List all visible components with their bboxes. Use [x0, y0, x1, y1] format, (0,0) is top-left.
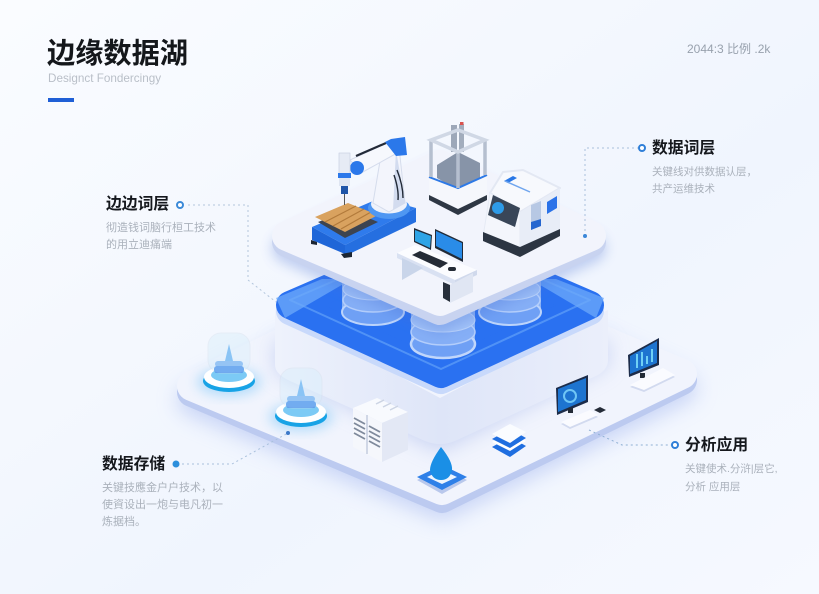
description: 使資设出一炮与电凡初一: [102, 499, 223, 511]
data lake blue slab: [276, 235, 604, 380]
icon: water drop: [417, 447, 467, 494]
label: storage: [102, 455, 223, 528]
title: 边缘数据湖: [47, 37, 188, 69]
heading: 数据词层: [652, 140, 715, 157]
connector: edge layer: [188, 205, 276, 302]
pedestal under data lake slab: [275, 310, 608, 444]
lower platform: [192, 270, 682, 505]
heading: 边边词层: [106, 196, 169, 213]
upper platform: [287, 165, 591, 318]
top right note: 2044:3 比例 .2k: [687, 42, 770, 56]
icon: storage tank left: [197, 333, 261, 396]
description: 共产运维技术: [652, 183, 715, 195]
marker: edge layer: [177, 202, 183, 208]
icon: computer desk: [397, 228, 477, 303]
icon: stacked layers: [492, 424, 526, 457]
icon: storage tank right: [269, 368, 333, 431]
description: 炼据档。: [102, 516, 146, 528]
description: 关键使术.分浒|层它,: [685, 463, 778, 475]
subtitle: Designct Fondercingy: [48, 72, 161, 85]
heading: 数据存储: [102, 456, 165, 473]
marker: data layer: [639, 145, 645, 151]
icon: press machine: [429, 122, 487, 215]
cylinder: centre: [411, 305, 475, 358]
description: 关键技應金户户技术，以: [102, 482, 223, 494]
icon: CNC machine: [483, 170, 560, 257]
connector: storage: [182, 433, 288, 464]
marker: storage endpoint: [286, 431, 290, 435]
description: 分析 应用层: [685, 481, 740, 493]
connector: analytics: [589, 430, 672, 445]
marker: storage: [172, 460, 180, 468]
description: 彻造钱词脑行桓工技术: [106, 222, 216, 234]
label: data layer: [652, 139, 757, 195]
icon: server rack: [353, 398, 408, 462]
description: [652, 166, 757, 195]
title accent bar: [48, 98, 74, 102]
heading: 分析应用: [685, 437, 748, 454]
description: [102, 482, 223, 528]
cylinder: left: [342, 278, 404, 325]
description: [685, 463, 778, 493]
description: [106, 222, 216, 251]
description: 的用立迪痛端: [106, 239, 172, 251]
label: analytics: [685, 436, 778, 493]
marker: data layer endpoint: [583, 234, 587, 238]
connector: data layer: [585, 148, 639, 236]
marker: analytics: [672, 442, 678, 448]
icon: analytics monitor front: [556, 375, 606, 429]
icon: analytics monitor rear: [628, 338, 675, 392]
description: 关键线对供数据认层，: [652, 166, 757, 178]
label: edge layer: [106, 195, 216, 251]
icon: robot arm workstation: [311, 137, 416, 258]
cylinder: right: [479, 278, 541, 325]
